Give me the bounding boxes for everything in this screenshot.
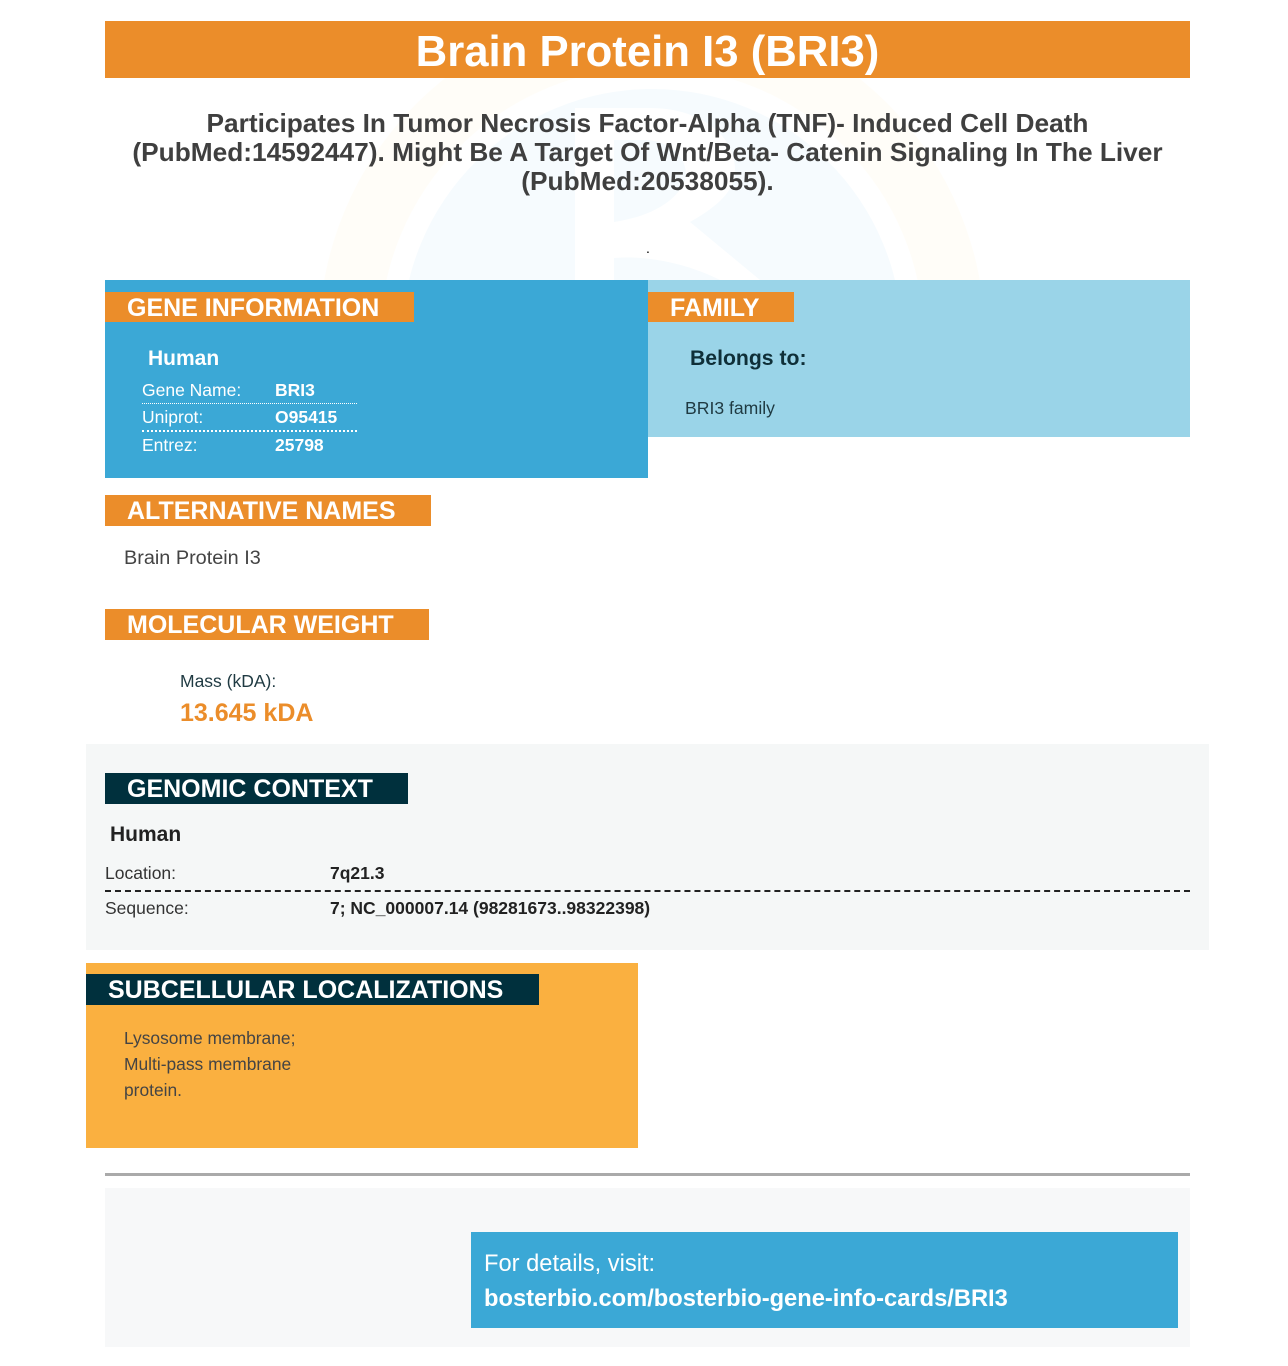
watermark logo	[410, 89, 894, 280]
sequence row	[105, 898, 650, 918]
visit label: For details, visit:	[484, 1251, 655, 1277]
gene info table: BRI3	[275, 380, 315, 400]
callout: details link	[471, 1232, 1178, 1328]
heading: genomic context: GENOMIC CONTEXT	[127, 775, 373, 803]
mass value: 13.645 kDA	[180, 699, 313, 727]
panel: genomic context	[86, 744, 1209, 950]
gene info table	[142, 380, 357, 455]
protein description: Participates In Tumor Necrosis Factor-Alpha (TNF)- Induced Cell Death	[207, 108, 1088, 138]
footer rule	[105, 1173, 1190, 1176]
protein description: (PubMed:14592447). Might Be A Target Of Wnt/Beta- Catenin Signaling In The Liver	[132, 137, 1163, 167]
heading: family: FAMILY	[670, 294, 759, 322]
panel: subcellular localizations	[86, 963, 638, 1148]
sequence row: Sequence:	[105, 898, 189, 918]
localization text	[124, 1028, 295, 1100]
title banner: Brain Protein I3 (BRI3)	[416, 27, 879, 76]
panel: gene information	[105, 280, 648, 478]
localization text: protein.	[124, 1080, 182, 1100]
protein description: (PubMed:20538055).	[521, 166, 774, 196]
row divider	[105, 890, 1190, 892]
family value: BRI3 family	[685, 398, 775, 418]
location row: Location:	[105, 863, 176, 883]
species label: Human	[148, 347, 219, 370]
location row: 7q21.3	[330, 863, 384, 883]
heading: family	[648, 292, 794, 322]
url: bosterbio.com/bosterbio-gene-info-cards/BRI3	[484, 1286, 1008, 1312]
alternative names text: Brain Protein I3	[124, 547, 261, 569]
belongs to label: Belongs to:	[690, 347, 807, 370]
gene info table: Uniprot:	[142, 407, 203, 427]
gene info table: Gene Name:	[142, 380, 241, 400]
dot: .	[646, 240, 650, 256]
localization text: Multi-pass membrane	[124, 1054, 291, 1074]
panel: footer	[105, 1188, 1190, 1347]
protein description	[132, 108, 1163, 196]
heading: gene information: GENE INFORMATION	[127, 294, 379, 322]
gene info table: 25798	[275, 435, 324, 455]
gene info table: Entrez:	[142, 435, 197, 455]
mass label: Mass (kDA):	[180, 671, 276, 691]
species label: Human	[110, 823, 181, 846]
gene info table: O95415	[275, 407, 337, 427]
title banner	[105, 21, 1190, 78]
sequence row: 7; NC_000007.14 (98281673..98322398)	[330, 898, 650, 918]
heading: alternative names: ALTERNATIVE NAMES	[127, 497, 396, 525]
localization text: Lysosome membrane;	[124, 1028, 295, 1048]
heading: molecular weight: MOLECULAR WEIGHT	[127, 611, 394, 639]
panel: family	[648, 280, 1190, 437]
heading: subcellular localizations: SUBCELLULAR LOCALIZATIONS	[108, 976, 503, 1004]
location row	[105, 863, 384, 883]
